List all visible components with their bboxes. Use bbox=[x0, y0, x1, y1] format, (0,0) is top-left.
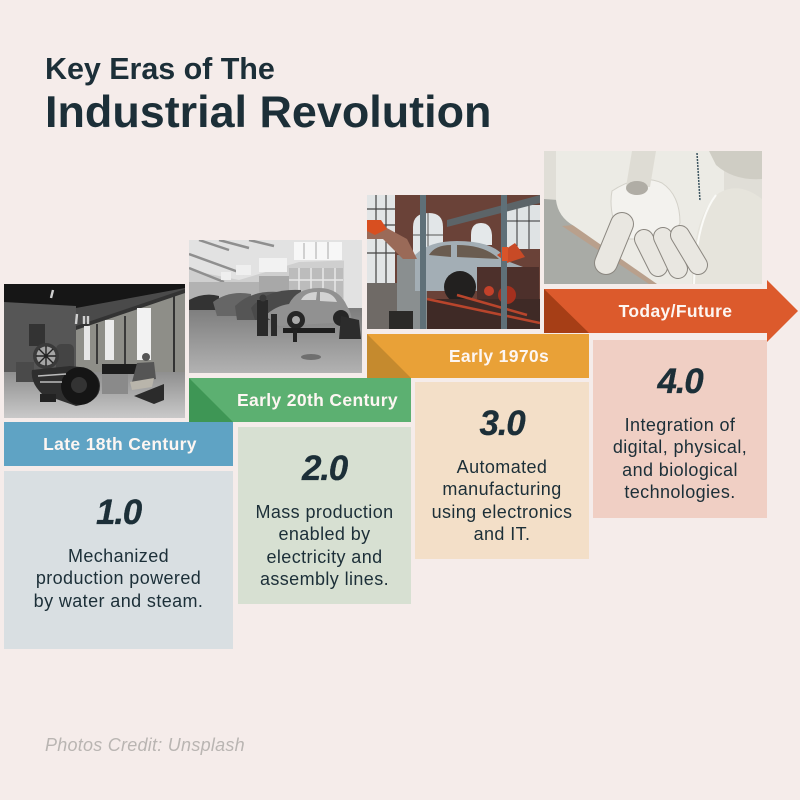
card: era 4.0 bbox=[593, 340, 767, 518]
banner: Early 1970s bbox=[367, 334, 589, 378]
photo: car assembly line bbox=[189, 240, 362, 373]
card: era 3.0: using electronics bbox=[432, 502, 572, 522]
title: Key Eras of The bbox=[45, 52, 275, 86]
card: era 1.0: 1.0 bbox=[96, 493, 141, 532]
card: era 1.0: Mechanized bbox=[68, 546, 169, 566]
card: era 2.0: assembly lines. bbox=[260, 569, 389, 589]
card: era 4.0: digital, physical, bbox=[613, 437, 747, 457]
card: era 4.0: 4.0 bbox=[657, 362, 703, 401]
card: era 2.0 bbox=[238, 427, 411, 604]
card: era 1.0: by water and steam. bbox=[34, 591, 203, 611]
banner: Early 20th Century bbox=[189, 378, 411, 422]
arrow banner: Today/Future bbox=[544, 280, 798, 342]
photo: robotic car factory bbox=[367, 195, 540, 329]
photo: robot hand bbox=[544, 151, 762, 284]
title bbox=[45, 52, 491, 136]
card: era 2.0: electricity and bbox=[266, 547, 383, 567]
photo: steam engine hall bbox=[4, 284, 185, 418]
banner: Early 1970s: Early 1970s bbox=[449, 346, 549, 366]
card: era 4.0: Integration of bbox=[625, 415, 735, 435]
card: era 1.0: production powered bbox=[36, 568, 201, 588]
card: era 2.0: Mass production bbox=[255, 502, 394, 522]
card: era 2.0: enabled by bbox=[278, 524, 371, 544]
banner: Late 18th Century: Late 18th Century bbox=[43, 434, 197, 454]
photo credit: Photos Credit: Unsplash bbox=[45, 735, 245, 755]
card: era 2.0: 2.0 bbox=[302, 449, 347, 488]
title: Industrial Revolution bbox=[45, 86, 491, 136]
banner: Late 18th Century bbox=[4, 422, 236, 466]
card: era 4.0: technologies. bbox=[624, 482, 736, 502]
card: era 1.0 bbox=[4, 471, 233, 649]
card: era 3.0: 3.0 bbox=[479, 404, 525, 443]
card: era 3.0 bbox=[415, 382, 589, 559]
arrow banner: Today/Future: Today/Future bbox=[619, 301, 732, 321]
card: era 3.0: manufacturing bbox=[442, 479, 562, 499]
card: era 4.0: and biological bbox=[622, 460, 738, 480]
card: era 3.0: and IT. bbox=[474, 524, 530, 544]
card: era 3.0: Automated bbox=[457, 457, 547, 477]
banner: Early 20th Century: Early 20th Century bbox=[237, 390, 398, 410]
